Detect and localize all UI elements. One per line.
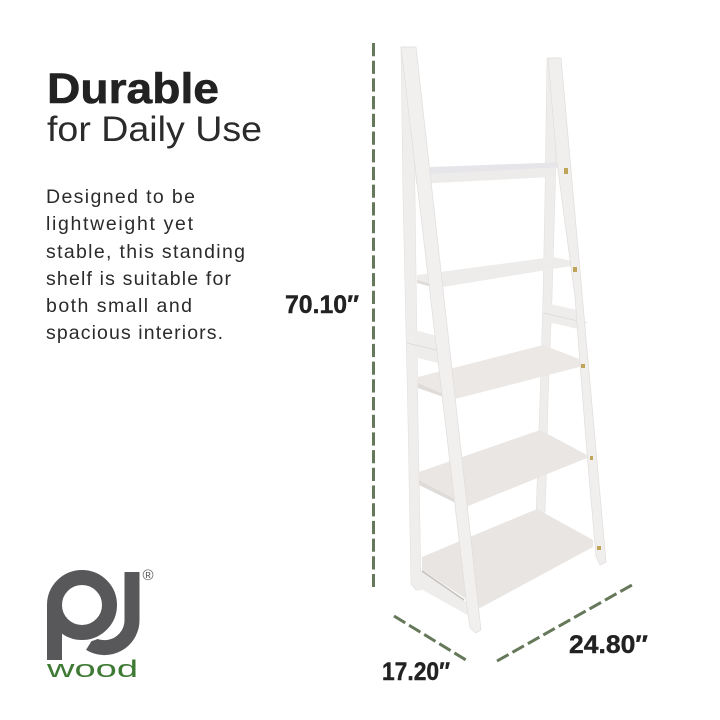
body text: spacious interiors. xyxy=(46,322,223,344)
brass brackets xyxy=(564,168,601,550)
title: for Daily Use xyxy=(47,110,262,149)
body text xyxy=(46,186,245,344)
logo letter j xyxy=(90,572,132,648)
left brace xyxy=(407,330,448,365)
shelf 3 xyxy=(418,345,587,401)
title: Durable xyxy=(47,65,219,113)
logo letter p xyxy=(46,569,118,660)
body text: Designed to be xyxy=(46,186,195,208)
title xyxy=(47,65,262,149)
registered mark: ® xyxy=(142,567,154,584)
right brace xyxy=(543,303,587,330)
logo: pj wood xyxy=(45,567,154,683)
body text: shelf is suitable for xyxy=(46,268,232,290)
back left post xyxy=(401,47,421,590)
front left leg xyxy=(401,47,481,633)
height label: 70.10″ xyxy=(285,291,359,319)
shelf 2 xyxy=(417,257,577,290)
body text: stable, this standing xyxy=(46,241,245,263)
width dimension line xyxy=(497,585,632,661)
shelf 5 with front apron xyxy=(414,509,593,621)
width label: 24.80″ xyxy=(569,631,648,659)
body text: lightweight yet xyxy=(46,213,194,235)
depth label: 17.20″ xyxy=(382,658,450,686)
height dimension line xyxy=(372,43,375,587)
shelf 1 with apron xyxy=(415,162,568,184)
front right leg xyxy=(548,58,606,565)
ladder shelf product xyxy=(401,47,606,633)
depth dimension line xyxy=(394,616,466,660)
body text: both small and xyxy=(46,295,192,317)
shelf 4 xyxy=(419,430,587,509)
logo wordmark: wood xyxy=(45,656,138,683)
back right post xyxy=(536,58,558,516)
